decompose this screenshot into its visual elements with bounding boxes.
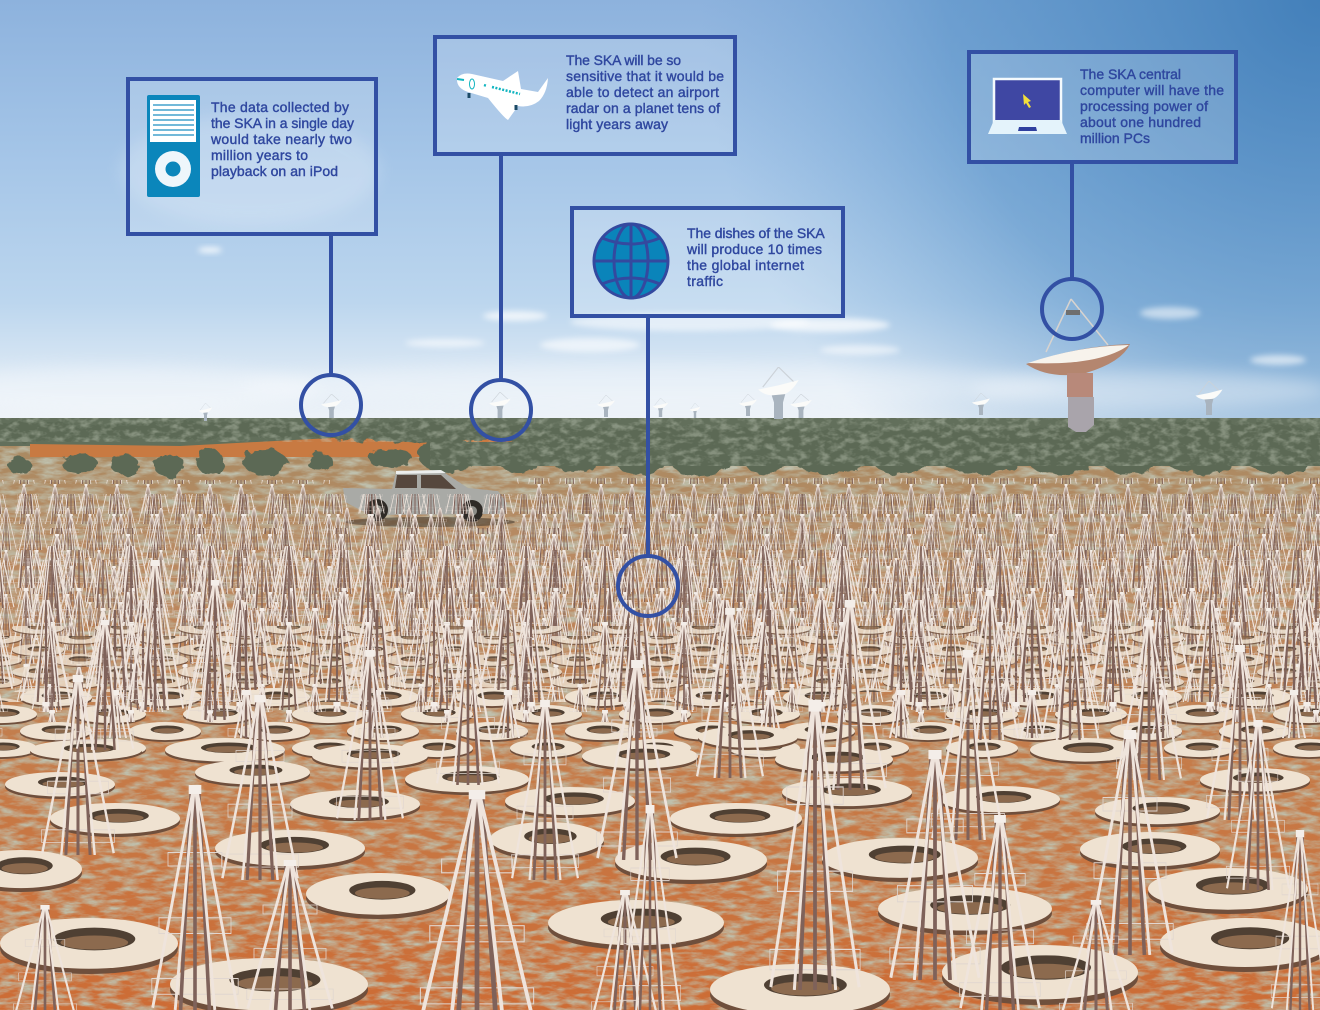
callout: airport radar xyxy=(435,37,735,440)
distant dishes on the horizon xyxy=(199,367,1222,421)
text: iPod fact: million years to xyxy=(211,147,308,163)
text: radar fact: sensitive that it would be xyxy=(566,68,724,84)
large dish antenna xyxy=(1026,299,1130,432)
text: iPod fact: playback on an iPod xyxy=(211,163,338,179)
near ring foundations xyxy=(0,726,1320,1010)
background: ground xyxy=(0,440,1320,1010)
far antennas in front of vehicle xyxy=(0,494,1320,702)
callout: central computer xyxy=(969,52,1236,339)
text: internet fact: traffic xyxy=(687,273,723,289)
text: radar fact: light years away xyxy=(566,116,668,132)
text: computing fact: about one hundred xyxy=(1080,114,1201,130)
icon: globe xyxy=(594,224,668,298)
far rows of antennas xyxy=(0,478,1320,524)
text: radar fact: able to detect an airport xyxy=(566,84,719,100)
far rows of ring foundations xyxy=(0,626,1320,765)
icon: iPod xyxy=(147,95,200,197)
text: radar fact: The SKA will be so xyxy=(566,52,681,68)
utility vehicle xyxy=(343,470,515,527)
text: internet fact: will produce 10 times xyxy=(686,241,822,257)
text: iPod fact: the SKA in a single day xyxy=(211,115,354,131)
callout: internet traffic xyxy=(572,208,843,616)
background: sky xyxy=(0,0,1320,420)
near antennas xyxy=(13,560,1320,1010)
middle rows of antennas xyxy=(0,546,1320,738)
text: internet fact: the global internet xyxy=(687,257,804,273)
text: computing fact: computer will have the xyxy=(1080,82,1224,98)
text: radar fact: radar on a planet tens of xyxy=(566,100,720,116)
text: iPod fact: The data collected by xyxy=(211,99,349,115)
text: computing fact: million PCs xyxy=(1080,130,1150,146)
text: computing fact: processing power of xyxy=(1080,98,1208,114)
icon: laptop xyxy=(988,79,1067,134)
text: internet fact: The dishes of the SKA xyxy=(687,225,825,241)
icon: aeroplane xyxy=(457,71,548,120)
text: computing fact: The SKA central xyxy=(1080,66,1181,82)
tree line xyxy=(0,418,1320,477)
text: iPod fact: would take nearly two xyxy=(210,131,352,147)
callout: iPod playback xyxy=(128,79,376,435)
